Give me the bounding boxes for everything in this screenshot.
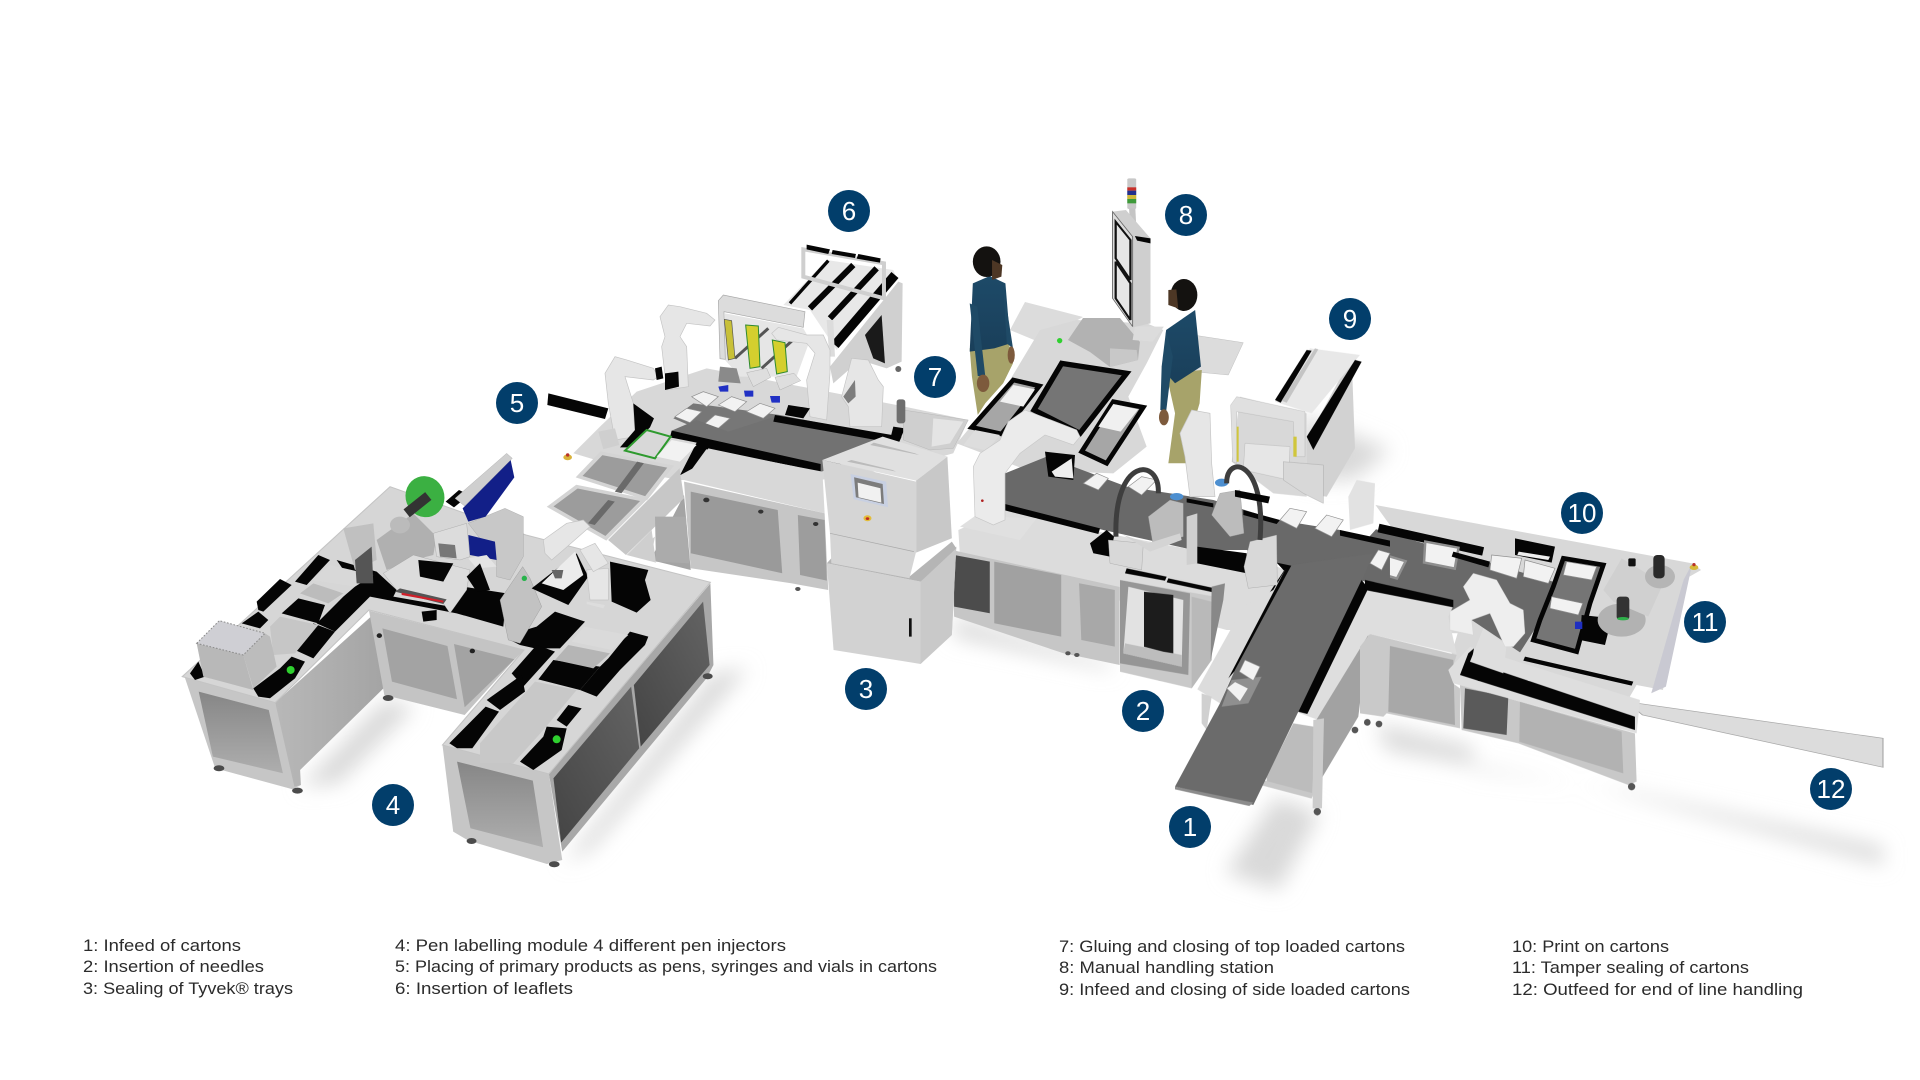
legend column 1: 1: Infeed of cartons [83, 936, 241, 955]
robot left module [543, 520, 608, 608]
gantry with light curtains [718, 295, 810, 390]
badge 4 [372, 784, 414, 826]
speckled sheet [1470, 628, 1507, 673]
legend column 1: 3: Sealing of Tyvek® trays [83, 979, 293, 998]
legend column 3 [1059, 937, 1410, 999]
badge 12: 12 [1817, 774, 1845, 804]
station robot and hood [1068, 318, 1140, 367]
stack of trays [197, 621, 277, 690]
conveyor frame and plates [963, 363, 1143, 463]
left arm front frame [185, 677, 301, 789]
green start button right [553, 735, 561, 743]
panel: left module conveyors and machine [190, 453, 523, 698]
legend column 1 [83, 936, 293, 998]
cabinet station 3 [822, 437, 956, 664]
emergency button [863, 515, 871, 521]
legend column 2: 6: Insertion of leaflets [395, 979, 573, 998]
badge 4: 4 [386, 790, 400, 820]
badge 7: 7 [928, 362, 942, 392]
black tray [1515, 538, 1555, 563]
robot on right table [1450, 573, 1525, 647]
legend column 4: 12: Outfeed for end of line handling [1512, 980, 1803, 999]
legend column 4: 10: Print on cartons [1512, 937, 1669, 956]
robot arms [605, 305, 883, 440]
arch guard green light [522, 576, 527, 581]
badge 6 [828, 190, 870, 232]
legend column 3: 9: Infeed and closing of side loaded cartons [1059, 980, 1410, 999]
station 6 leaflet magazine [783, 245, 903, 383]
side plate right [1193, 335, 1243, 375]
conveyor black edges [1003, 498, 1390, 631]
cabinet touch screen [851, 474, 888, 507]
framed station [1533, 558, 1603, 652]
green button [1057, 338, 1062, 343]
lower black strip [1523, 657, 1633, 686]
carton pack near robot [1045, 452, 1157, 495]
emergency stop [1690, 563, 1698, 570]
infeed left black edge [1228, 565, 1293, 678]
table top [1364, 505, 1701, 708]
back black strip [1378, 528, 1483, 551]
carton trays station 5 [598, 385, 810, 449]
legend column 3: 7: Gluing and closing of top loaded cartons [1059, 937, 1405, 956]
black conveyors [449, 563, 648, 770]
feet [214, 673, 713, 867]
badge 10 [1561, 492, 1603, 534]
extension black strip [1460, 648, 1635, 730]
small cartons [1376, 542, 1458, 578]
legend column 1: 2: Insertion of needles [83, 957, 264, 976]
bench front [1360, 634, 1637, 785]
right table top [1298, 589, 1457, 719]
emergency stop left [563, 453, 572, 460]
mesh panel [627, 517, 689, 563]
centre robot [1180, 410, 1215, 497]
white slab [542, 552, 583, 590]
blue cap [1575, 622, 1582, 629]
scara robot right [1212, 467, 1277, 588]
badge 3: 3 [859, 674, 873, 704]
badge 1: 1 [1183, 812, 1197, 842]
legend text [83, 936, 1803, 999]
bench panels [954, 555, 1115, 647]
legend column 2: 4: Pen labelling module 4 different pen injectors [395, 936, 786, 955]
badge 10: 10 [1568, 498, 1596, 528]
person left [970, 246, 1015, 415]
black slab [532, 553, 588, 605]
badge 11 [1684, 601, 1726, 643]
cartons at infeed [1222, 660, 1262, 707]
conveyor front lip [1175, 787, 1253, 806]
badge 5 [496, 382, 538, 424]
legend column 4: 11: Tamper sealing of cartons [1512, 958, 1749, 977]
feet centre [1065, 651, 1080, 657]
cabinet handle [909, 618, 912, 637]
extension top [1448, 647, 1640, 733]
badge 1 [1169, 806, 1211, 848]
panel: centre line front section [550, 437, 1120, 665]
badge 5: 5 [510, 388, 524, 418]
person right [1159, 279, 1202, 463]
outfeed rail station 12 [1627, 702, 1883, 767]
panel: right line section with stations 10, 11 and 12 [1364, 505, 1883, 767]
left arm front panel [199, 692, 283, 773]
cartons [1490, 555, 1597, 615]
inner front bench [369, 611, 524, 715]
badge 8: 8 [1179, 200, 1193, 230]
panel: infeed conveyor and front bench [1120, 553, 1640, 815]
labelling machine [343, 453, 523, 622]
front tabletop left of cabinet [684, 449, 825, 513]
right arm front frame [442, 745, 562, 864]
panel: station 9 side infeed [1231, 348, 1375, 530]
feet [1314, 719, 1635, 815]
right arm front panel [457, 762, 543, 847]
arch guard [500, 567, 542, 643]
legend column 3: 8: Manual handling station [1059, 958, 1274, 977]
labels: numbered station badges [372, 190, 1852, 848]
station table [957, 320, 1163, 473]
badge 9 [1329, 298, 1371, 340]
white cartons on conveyor [1280, 508, 1390, 570]
green start button left [287, 666, 295, 674]
badge 8 [1165, 194, 1207, 236]
badge 11: 11 [1692, 607, 1718, 637]
panel: right arm conveyors and robot [449, 517, 689, 770]
plates [480, 627, 628, 763]
emergency button cap [866, 517, 869, 520]
upper table top [573, 368, 968, 480]
table side [1651, 563, 1692, 693]
panels left [691, 492, 827, 581]
badge 3 [845, 668, 887, 710]
station 2 frame [1120, 568, 1225, 688]
legend column 2: 5: Placing of primary products as pens, syringes and vials in cartons [395, 957, 937, 976]
white tray inner [1517, 552, 1550, 560]
gluing unit station 7 [897, 399, 968, 450]
table top [182, 487, 710, 774]
scara robot left [1108, 470, 1197, 570]
badge 7 [914, 356, 956, 398]
panel: conveyor extension toward final stations [1354, 528, 1563, 652]
badge 9: 9 [1343, 304, 1357, 334]
panel: operators and control tower [970, 178, 1202, 463]
panel: main dark conveyor [958, 410, 1390, 631]
big robot at cabinet [960, 410, 1080, 540]
infeed left table [1197, 567, 1292, 703]
sealing machine [1598, 555, 1675, 637]
left arm side [275, 617, 384, 787]
floor shadows [300, 413, 1883, 890]
black pen feeder bar [547, 393, 608, 419]
legend column 2 [395, 936, 937, 998]
dark conveyor extension [1354, 529, 1563, 652]
left arm black conveyors [190, 555, 507, 698]
conveyor right black edge [1298, 580, 1368, 714]
black carton box [610, 562, 651, 613]
front frame left [684, 482, 828, 590]
bench front frame [952, 550, 1120, 665]
hmi tower with signal light [1113, 178, 1164, 342]
front leg [1313, 718, 1324, 808]
right arm side panels [549, 583, 713, 852]
legend column 4 [1512, 937, 1803, 999]
panel: centre line back section with stations 5, 6 and 7 [547, 245, 968, 480]
under structure [1202, 693, 1314, 799]
inclined infeed conveyor station 1 [1175, 553, 1373, 805]
badge 2 [1122, 690, 1164, 732]
side plate left [1010, 302, 1083, 342]
upper black strip [1452, 552, 1490, 567]
upper black edge [1365, 580, 1453, 607]
panel: left pen labelling module station 4 [182, 487, 713, 867]
badge 12 [1810, 768, 1852, 810]
front table top [958, 510, 1285, 630]
aluminium frame conveyor with mesh panel [550, 453, 691, 570]
feet left [795, 587, 801, 591]
panel: final stations 10 and 11 [1452, 538, 1698, 686]
side panel [1317, 635, 1368, 778]
badge 6: 6 [842, 196, 856, 226]
dark conveyor section with black edges [670, 415, 905, 475]
green pen tray [625, 430, 697, 462]
panel: manual handling station 8 [957, 302, 1243, 473]
black block [1580, 615, 1612, 645]
left arm plates [270, 565, 373, 655]
badge 2: 2 [1136, 696, 1150, 726]
